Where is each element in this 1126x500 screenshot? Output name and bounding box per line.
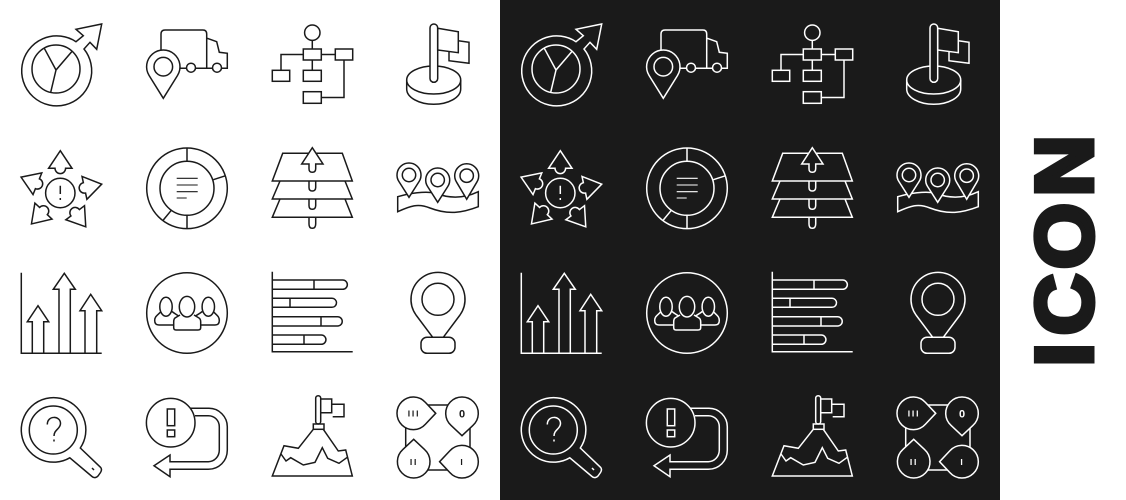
icon: four numbered drop pins in a loop: II [910,457,918,467]
icon: team in circle [147,273,227,353]
icon: three pins on a map [897,163,979,212]
icon: male symbol with pie chart [522,24,602,106]
icon: alert with u-turn arrow [646,398,727,477]
icon: delivery truck with location pin [147,30,227,98]
panel: dark icon grid [500,0,1000,500]
icon: horizontal bar chart [272,272,353,352]
icon: mountain summit flag [272,396,352,476]
panel: light icon grid [0,0,500,500]
icon: flow chart [772,25,853,103]
icon: growth arrows chart [521,273,602,353]
icon: magnifier with question mark [21,398,101,478]
icon: alert with u-turn arrow [146,398,227,477]
icon: location pin on base [411,272,465,353]
icon: flag on round base [907,24,969,104]
icon: stacked layers with up arrow [272,148,352,228]
title: vertical ICON wordmark: ICON [1019,135,1109,366]
icon: four numbered drop pins in a loop: I [460,457,465,467]
icon: four numbered drop pins in a loop: 0 [959,408,965,420]
icon: flow chart [272,25,353,103]
icon: donut chart with text lines [147,148,227,229]
icon: four numbered drop pins in a loop: II [410,457,418,467]
icon: delivery truck with location pin [647,30,727,98]
icon: four numbered drop pins in a loop [397,397,478,478]
icon: four numbered drop pins in a loop: I [960,457,965,467]
icon: alert with five arrows [17,151,104,234]
icon: four numbered drop pins in a loop: 0 [459,408,465,420]
icon: male symbol with pie chart [22,24,102,106]
icon: four numbered drop pins in a loop: III [408,408,420,418]
icon: four numbered drop pins in a loop [897,397,978,478]
icon: growth arrows chart [21,273,102,353]
icon: location pin on base [911,272,965,353]
icon: alert with five arrows [517,151,604,234]
icon: stacked layers with up arrow [772,148,852,228]
icon: flag on round base [407,24,469,104]
icon: three pins on a map [397,163,479,212]
icon: horizontal bar chart [772,272,853,352]
icon: team in circle [647,273,727,353]
icon: mountain summit flag [772,396,852,476]
icon: magnifier with question mark [521,398,602,478]
icon: donut chart with text lines [647,148,727,229]
icon: four numbered drop pins in a loop: III [908,408,920,418]
